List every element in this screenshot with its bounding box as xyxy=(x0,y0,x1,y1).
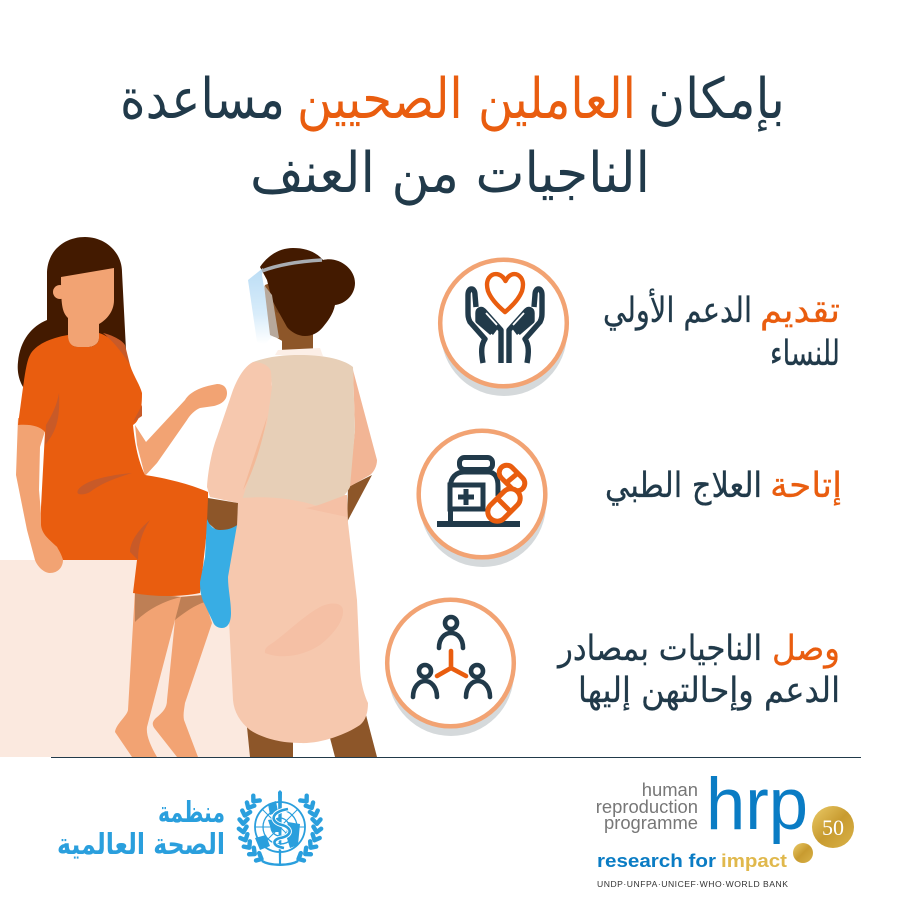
logo: HRP: reproduction xyxy=(596,796,698,817)
text: third action: وصل xyxy=(772,629,840,669)
logo: HRP: hrp xyxy=(706,764,808,845)
figure: health worker with face shield xyxy=(200,248,377,757)
text: third action: الناجيات بمصادر xyxy=(556,629,762,669)
figure: seated woman in orange dress xyxy=(16,237,227,757)
logo: HRP: UNDP·UNFPA·UNICEF·WHO·WORLD BANK xyxy=(597,879,788,889)
title: الناجيات من العنف xyxy=(250,141,650,206)
title: العاملين الصحيين xyxy=(297,67,636,132)
title: مساعدة xyxy=(120,67,285,132)
logo: HRP: research for xyxy=(597,851,716,871)
text: first action xyxy=(603,288,840,374)
icon: hands holding heart xyxy=(440,260,567,396)
logo: HRP: programme xyxy=(604,812,698,833)
logo text: WHO in Arabic: منظمة xyxy=(158,795,225,829)
title: بإمكان xyxy=(648,67,785,133)
title xyxy=(120,67,785,206)
logo text: WHO in Arabic xyxy=(57,795,225,861)
logo: HRP: impact xyxy=(721,851,787,871)
logo: HRP xyxy=(596,764,854,889)
logo: HRP: human xyxy=(642,779,698,800)
text: second action: العلاج الطبي xyxy=(605,466,762,506)
text: third action: الدعم وإحالتهن إليها xyxy=(578,671,840,711)
logo text: WHO in Arabic: الصحة العالمية xyxy=(57,827,225,861)
icon: medicine bottle and pills xyxy=(419,431,546,567)
icon: connected people network xyxy=(387,600,514,736)
logo: HRP: 50 xyxy=(822,815,844,840)
text: third action xyxy=(556,629,840,711)
logo: World Health Organization emblem xyxy=(239,790,321,866)
text: first action: الدعم الأولي xyxy=(603,288,752,331)
bench xyxy=(0,560,250,757)
text: first action: للنساء xyxy=(770,334,840,374)
text: first action: تقديم xyxy=(760,291,840,331)
text: second action: إتاحة xyxy=(770,466,842,506)
